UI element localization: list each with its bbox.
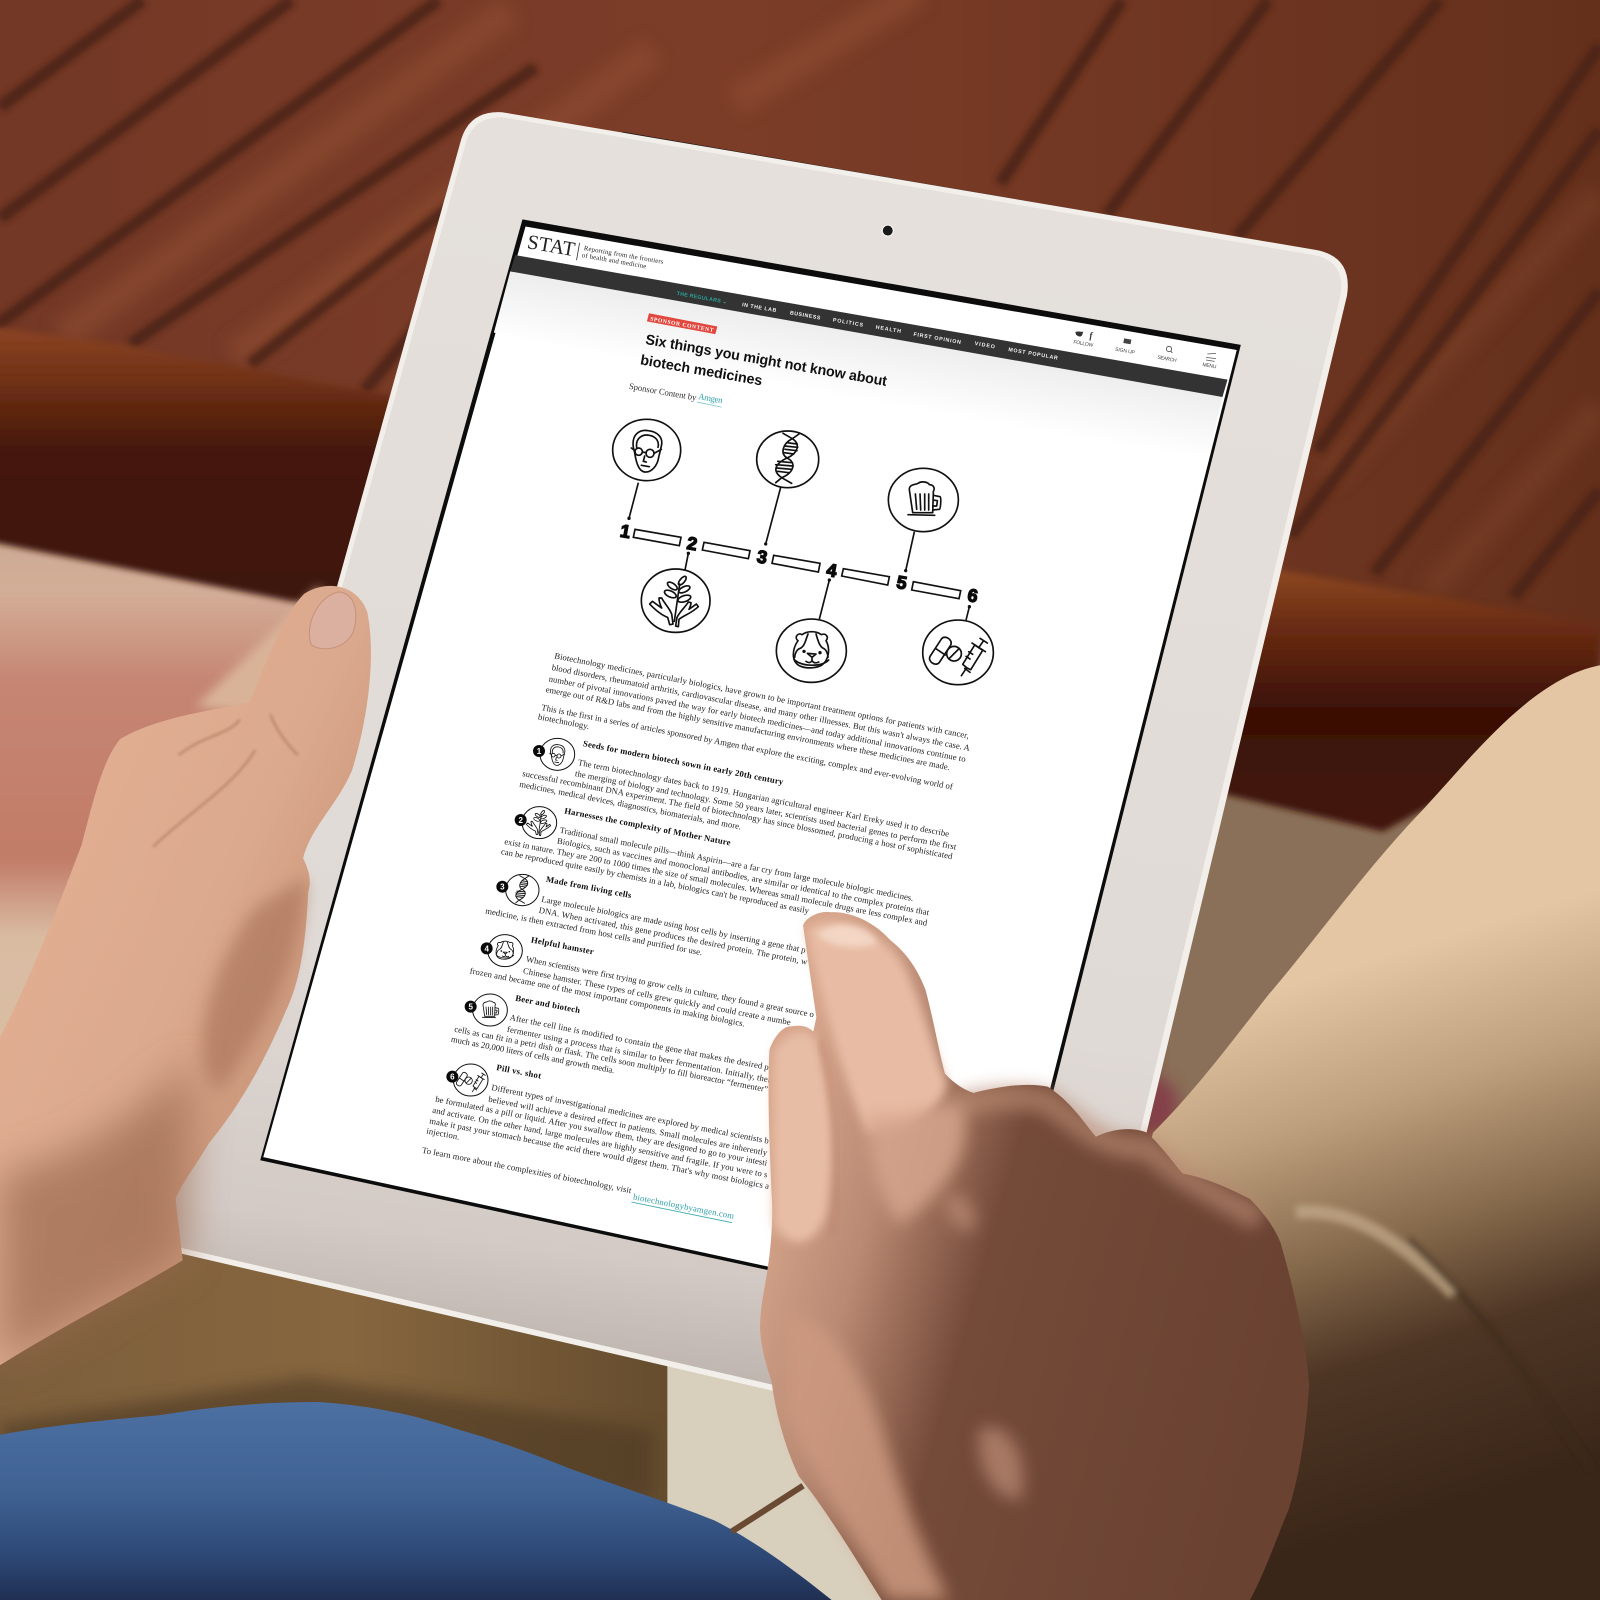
section 5: beer: 5 (468, 1003, 473, 1012)
nav: links: BUSINESS (789, 310, 821, 322)
intro paragraphs: blood disorders, rheumatoid arthritis, cardiovascular disease, and many other illnesses. But this wasn't always the case. A (551, 662, 972, 753)
timeline numbers: 3 (755, 546, 769, 568)
section 6: pill vs shot: believed will achieve a desired effect in patients. Small molecules are inherently (488, 1094, 769, 1158)
section 4: hamster: Chinese hamster. These types of cells grew quickly and could create a numbe (522, 965, 792, 1027)
section 3: living cells: medicine, is then extracted from host cells and purified for use. (485, 906, 703, 957)
header: right icons: FOLLOW (1073, 339, 1094, 349)
icon: hamster (793, 632, 829, 668)
left hand: knuckle creases (153, 714, 298, 847)
article title: biotech medicines (639, 352, 764, 389)
left hand: palm shadow (203, 878, 306, 1092)
header: right icons (1073, 331, 1217, 370)
timeline numbers: 4 (825, 560, 838, 581)
byline (628, 381, 724, 407)
article body, upper (485, 650, 972, 967)
right hand: finger crease (820, 1041, 836, 1235)
background: right lower floor (1153, 653, 1600, 1173)
right hand: pale middle finger (773, 1032, 832, 1242)
section 4: hamster: When scientists were first trying to grow cells in culture, they found a great source o (525, 954, 815, 1019)
background: light floor between legs (667, 1362, 980, 1600)
section 6: pill vs shot (426, 1062, 770, 1191)
section 5: beer: fermenter using a process that is similar to beer fermentation. Initially, ther (506, 1024, 772, 1085)
background: wooden deck (0, 0, 1600, 653)
background: dark wooden bench right (1214, 566, 1600, 832)
section 1: seeds: The term biotechnology dates back to 1919. Hungarian agricultural engineer Karl Ereky used it to describe (577, 757, 950, 839)
left hand (0, 586, 371, 1365)
byline: Sponsor Content by (628, 381, 698, 403)
jeans (0, 1402, 832, 1600)
sponsor badge: SPONSOR CONTENT (650, 316, 714, 334)
nav: links: HEALTH (875, 325, 901, 335)
background: pink reflection near tablet (1138, 1079, 1179, 1136)
header: right icons: SEARCH (1157, 355, 1177, 364)
section 4: hamster: 4 (484, 944, 489, 953)
background: dark wooden bench left (0, 324, 429, 624)
header: dark nav band (510, 255, 1228, 397)
timeline numbers: 2 (685, 533, 699, 554)
header: right icons: SIGN UP (1115, 347, 1136, 356)
header: tagline: Reporting from the frontiers (583, 245, 664, 266)
right hand: lit wrist (786, 1315, 949, 1600)
section 1: seeds: medicines, medical devices, diagnostics, biomaterials, and more. (519, 779, 742, 832)
tablet: screen (260, 219, 1241, 1319)
section 6: pill vs shot: Pill vs. shot (496, 1062, 542, 1081)
icon: pills and syringe (930, 637, 987, 676)
timeline numbers: 6 (966, 585, 979, 606)
right hand: pale index finger (806, 922, 947, 1133)
right hand: index finger base (867, 1101, 966, 1224)
intro paragraphs: Biotechnology medicines, particularly biologics, have grown to be important treatment options for patients with cancer, (554, 650, 970, 740)
nav: links: FIRST OPINION (913, 332, 961, 346)
trousers: right leg (1071, 665, 1600, 1600)
section 5: beer: much as 20,000 liters of cells and growth media. (450, 1034, 616, 1075)
section 3: living cells (485, 874, 809, 967)
section 3: living cells: Large molecule biologics are made using host cells by inserting a gene that p (541, 894, 807, 955)
section 3: living cells: 3 (500, 883, 505, 892)
intro paragraphs: emerge out of R&D labs and from the highly sensitive manufacturing environments where these medicines are made. (545, 684, 951, 772)
cable (732, 1486, 803, 1532)
section 2: mother nature: Traditional small molecule pills—think Aspirin—are a far cry from large molecule biologic medicines. (559, 825, 914, 903)
right hand: knuckle highlights (944, 1193, 1023, 1500)
nav: links: VIDEO (974, 341, 995, 350)
byline: Amgen (698, 391, 724, 405)
section 5: beer: After the cell line is modified to contain the gene that makes the desired p (509, 1012, 770, 1072)
left hand: wrist shading (0, 1061, 194, 1365)
nav: links: POLITICS (832, 317, 864, 329)
section 2: mother nature: can be reproduced quite easily by chemists in a lab, biologics can't be reproduced as easily (500, 846, 811, 916)
nav: links: THE REGULARS ⌄ (676, 291, 727, 306)
header: right icons: f (1089, 332, 1093, 342)
timeline numbers (619, 521, 979, 606)
intro paragraphs: number of pivotal innovations paved the way for early biotech medicines—and today additional innovations continue to (548, 673, 967, 764)
nav band shadow fade (494, 271, 1222, 461)
header: right icons: MENU (1202, 362, 1217, 370)
right hand (760, 912, 1309, 1600)
section 2: mother nature: 2 (518, 816, 523, 825)
section 4: hamster: frozen and became one of the most important components in making biologics. (469, 965, 746, 1029)
section 4: hamster (469, 934, 815, 1029)
article title: Six things you might not know about (644, 332, 888, 390)
right hand: finger tip highlight (816, 925, 878, 947)
closing line with link: biotechnologybyamgen.com (632, 1192, 735, 1221)
timeline numbers: 1 (619, 521, 632, 542)
section 5: beer (450, 993, 774, 1095)
section 1: seeds: 1 (537, 747, 542, 756)
icon: scientist face (631, 430, 662, 472)
section 6: pill vs shot: injection. (426, 1125, 461, 1142)
section 6: pill vs shot: and activate. On the other hand, large molecules are highly sensitive and fragile. If you were to s (432, 1105, 769, 1180)
background: lower left floor (0, 531, 429, 1163)
section 2: mother nature: Biologics, such as vaccines and monoclonal antibodies, are similar or identical to the complex proteins that (556, 835, 931, 917)
timeline diagram (613, 419, 993, 685)
nav: links (676, 291, 1058, 362)
article body, lower (421, 934, 815, 1223)
tablet (159, 112, 1348, 1459)
left hand: thumb nail (309, 592, 356, 649)
intro paragraphs: This is the first in a series of articles sponsored by Amgen that explore the exciting, complex and ever-evolving world of (541, 702, 954, 792)
header: tagline: of health and medicine (581, 252, 647, 270)
intro paragraphs: biotechnology. (537, 711, 590, 731)
section 5: beer: cells as can fit in a petri dish or flask. The cells soon multiply to fill bioreactor “fermenter” t (454, 1024, 774, 1095)
section 2: mother nature: Harnesses the complexity of Mother Nature (564, 805, 732, 847)
section 2: mother nature: exist in nature. They are 200 to 1000 times the size of small molecules. Whereas small molecule drugs are less complex and (504, 836, 929, 928)
arm strip behind left thumb (196, 587, 337, 714)
intro paragraphs (537, 650, 972, 792)
section 6: pill vs shot: 6 (450, 1073, 455, 1082)
nav: links: IN THE LAB (741, 302, 777, 314)
timeline numbers: 5 (895, 572, 908, 593)
trousers: left leg (0, 1245, 776, 1600)
header: divider (577, 243, 580, 260)
section 1: seeds: the merging of biology and technology. Some 50 years later, scientists used bacterial genes to perform the first (574, 768, 958, 852)
section 6: pill vs shot: Different types of investigational medicines are explored by medical scientists b (491, 1082, 770, 1146)
closing line with link: To learn more about the complexities of biotechnology, visit (421, 1145, 633, 1195)
section 3: living cells: DNA. When activated, this gene produces the desired protein. The protein, w (538, 905, 809, 967)
nav: links: MOST POPULAR (1008, 347, 1058, 362)
icon: beer mug (908, 482, 941, 515)
icon: plant in hands (650, 575, 698, 627)
icon: DNA helix (776, 433, 799, 483)
section 6: pill vs shot: make it past your stomach because the acid there would digest them. That's why most biologics a (429, 1115, 770, 1191)
section 1: seeds: Seeds for modern biotech sown in early 20th century (582, 738, 785, 787)
tablet: rim (159, 112, 1348, 1459)
trousers: dark band above jeans (0, 1378, 653, 1500)
section 4: hamster: Helpful hamster (530, 934, 595, 956)
tablet: back edge (622, 134, 1189, 231)
right hand: lit knuckle ridge (954, 1098, 1260, 1219)
section 1: seeds: successful recombinant DNA experiment. The field of biotechnology has since blossomed, producing a host of sophisticated (522, 768, 954, 861)
section 6: pill vs shot: be formulated as a pill or liquid. After you swallow them, they are designed to go to your intesti (435, 1094, 769, 1168)
closing line with link (421, 1145, 735, 1223)
header: STAT logo: STAT (526, 231, 577, 261)
tablet: body (165, 117, 1341, 1452)
section 5: beer: Beer and biotech (515, 993, 581, 1015)
trousers: fabric highlight and crease (1296, 1212, 1592, 1469)
tablet: camera (882, 225, 893, 236)
section 3: living cells: Made from living cells (545, 874, 633, 900)
